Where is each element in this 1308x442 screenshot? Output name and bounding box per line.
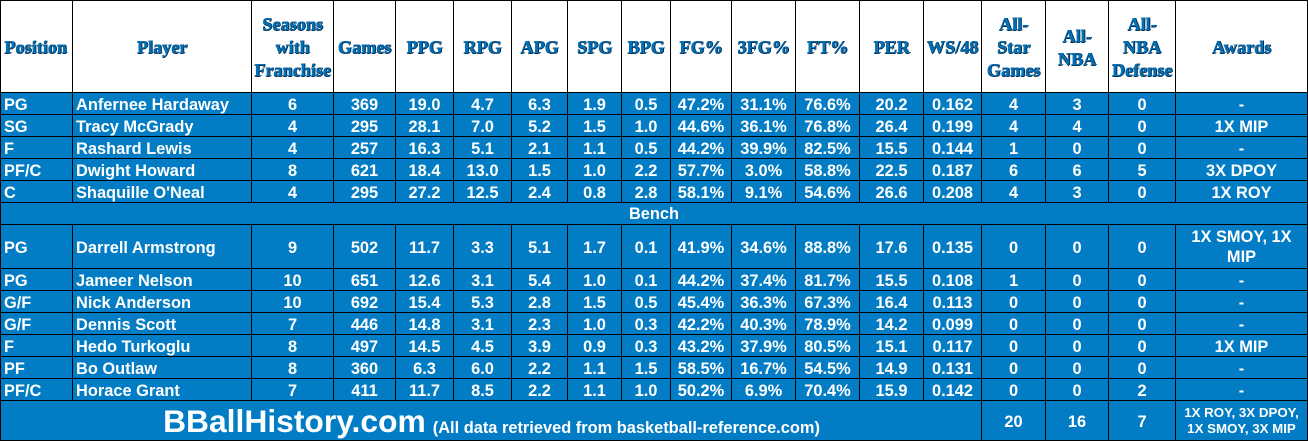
row: Jameer Nelson: 81.7% bbox=[804, 272, 851, 290]
header row: All- bbox=[1062, 26, 1092, 46]
row: Dwight Howard: 58.8% bbox=[804, 162, 851, 180]
row: Dennis Scott: 0 bbox=[1072, 316, 1082, 334]
row: Bo Outlaw: 54.5% bbox=[804, 360, 851, 378]
row: Anfernee Hardaway: 19.0 bbox=[409, 96, 440, 114]
row: Horace Grant: 6.9% bbox=[745, 382, 782, 400]
row: Jameer Nelson: 10 bbox=[283, 272, 302, 290]
row: Hedo Turkoglu: 14.5 bbox=[409, 338, 440, 356]
row: Horace Grant: 1.1 bbox=[583, 382, 606, 400]
row: Bo Outlaw: 1.5 bbox=[635, 360, 657, 378]
row: Tracy McGrady: 5.2 bbox=[528, 118, 551, 136]
row: Dennis Scott: 0.3 bbox=[635, 316, 657, 334]
row: Jameer Nelson: PG bbox=[4, 272, 28, 290]
row: Nick Anderson: 692 bbox=[351, 294, 378, 312]
row: Jameer Nelson: 1 bbox=[1009, 272, 1018, 290]
row: Hedo Turkoglu: 37.9% bbox=[740, 338, 787, 356]
row: Anfernee Hardaway: - bbox=[1239, 96, 1244, 114]
row: Tracy McGrady: 0 bbox=[1137, 118, 1147, 136]
row: Dwight Howard: 621 bbox=[351, 162, 378, 180]
row: Horace Grant: 2 bbox=[1137, 382, 1147, 400]
row: Nick Anderson: 36.3% bbox=[740, 294, 787, 312]
row: Dennis Scott: 2.3 bbox=[528, 316, 551, 334]
header row: FT% bbox=[807, 37, 848, 57]
row: Bo Outlaw: 16.7% bbox=[740, 360, 787, 378]
row: Horace Grant: 0 bbox=[1009, 382, 1018, 400]
row: Jameer Nelson: 44.2% bbox=[678, 272, 724, 290]
row: Dwight Howard: 22.5 bbox=[876, 162, 907, 180]
header row: Games bbox=[987, 60, 1040, 80]
row: Jameer Nelson: 15.5 bbox=[876, 272, 907, 290]
header row: Awards bbox=[1212, 37, 1271, 57]
row: Shaquille O'Neal: 27.2 bbox=[409, 184, 440, 202]
row: Jameer Nelson: 12.6 bbox=[409, 272, 440, 290]
row: Anfernee Hardaway: 76.6% bbox=[804, 96, 851, 114]
row: Bo Outlaw: 8 bbox=[288, 360, 297, 378]
row: Jameer Nelson: 1.0 bbox=[583, 272, 606, 290]
row: Horace Grant: 1.0 bbox=[635, 382, 657, 400]
header row: with bbox=[275, 37, 310, 57]
row: Shaquille O'Neal: 9.1% bbox=[745, 184, 782, 202]
row: Horace Grant: 7 bbox=[288, 382, 297, 400]
row: Tracy McGrady: 1.5 bbox=[583, 118, 606, 136]
row: Dennis Scott: 0.099 bbox=[932, 316, 973, 334]
row: Rashard Lewis: 16.3 bbox=[409, 140, 440, 158]
row: Shaquille O'Neal: 26.6 bbox=[876, 184, 907, 202]
header row: APG bbox=[520, 37, 559, 57]
row: Hedo Turkoglu: 43.2% bbox=[678, 338, 724, 356]
row: Tracy McGrady: 1X MIP bbox=[1215, 118, 1268, 136]
row: Darrell Armstrong: MIP bbox=[1227, 248, 1256, 266]
row: Horace Grant: - bbox=[1239, 382, 1244, 400]
row: Horace Grant: 2.2 bbox=[528, 382, 551, 400]
row: Tracy McGrady: 76.8% bbox=[804, 118, 851, 136]
row: Dwight Howard: 0.187 bbox=[932, 162, 973, 180]
row: Horace Grant: 8.5 bbox=[471, 382, 494, 400]
header row: Defense bbox=[1112, 60, 1172, 80]
row: Dennis Scott: G/F bbox=[4, 316, 31, 334]
row: Shaquille O'Neal: 2.8 bbox=[635, 184, 657, 202]
row: Darrell Armstrong: 5.1 bbox=[528, 238, 551, 256]
row: Anfernee Hardaway: 0.162 bbox=[932, 96, 973, 114]
row: Nick Anderson: 5.3 bbox=[471, 294, 494, 312]
row: Nick Anderson: 0 bbox=[1137, 294, 1147, 312]
row: Nick Anderson: 67.3% bbox=[804, 294, 851, 312]
row: Hedo Turkoglu: 80.5% bbox=[804, 338, 851, 356]
section heading: Bench: Bench bbox=[629, 204, 679, 222]
row: Jameer Nelson: 37.4% bbox=[740, 272, 787, 290]
footer row: source credit and totals: 1X SMOY, 3X MIP bbox=[1187, 420, 1296, 436]
header row: Player bbox=[137, 37, 187, 57]
header row: PER bbox=[873, 37, 910, 57]
row: Rashard Lewis: 2.1 bbox=[528, 140, 551, 158]
row: Tracy McGrady: 7.0 bbox=[471, 118, 494, 136]
row: Horace Grant: Horace Grant bbox=[76, 382, 180, 400]
row: Horace Grant bbox=[0, 378, 1308, 400]
header row: Franchise bbox=[254, 60, 331, 80]
row: Nick Anderson: 0.5 bbox=[635, 294, 657, 312]
row: Anfernee Hardaway: 0 bbox=[1137, 96, 1147, 114]
row: Tracy McGrady: 4 bbox=[1009, 118, 1018, 136]
row: Dwight Howard: 18.4 bbox=[409, 162, 440, 180]
row: Darrell Armstrong: 0 bbox=[1072, 238, 1082, 256]
row: Bo Outlaw: 6.3 bbox=[413, 360, 436, 378]
row: Darrell Armstrong: 34.6% bbox=[740, 238, 787, 256]
row: Tracy McGrady: SG bbox=[4, 118, 28, 136]
row: Dennis Scott: 7 bbox=[288, 316, 297, 334]
row: Anfernee Hardaway: Anfernee Hardaway bbox=[76, 96, 229, 114]
row: Horace Grant: 411 bbox=[351, 382, 378, 400]
header row: Games bbox=[338, 37, 391, 57]
row: Dennis Scott: Dennis Scott bbox=[76, 316, 176, 334]
row: Rashard Lewis: 257 bbox=[351, 140, 378, 158]
row: Darrell Armstrong: PG bbox=[4, 238, 28, 256]
row: Darrell Armstrong: 9 bbox=[288, 238, 297, 256]
row: Bo Outlaw: Bo Outlaw bbox=[76, 360, 157, 378]
row: Shaquille O'Neal: 0 bbox=[1137, 184, 1147, 202]
row: Nick Anderson bbox=[0, 290, 1308, 312]
header row: 3FG% bbox=[737, 37, 790, 57]
row: Bo Outlaw: - bbox=[1239, 360, 1244, 378]
row: Horace Grant: 70.4% bbox=[804, 382, 851, 400]
row: Shaquille O'Neal bbox=[0, 180, 1308, 202]
row: Tracy McGrady: 36.1% bbox=[740, 118, 787, 136]
row: Hedo Turkoglu: 0 bbox=[1137, 338, 1147, 356]
row: Dennis Scott: 14.2 bbox=[876, 316, 907, 334]
row: Anfernee Hardaway: 6.3 bbox=[528, 96, 551, 114]
row: Jameer Nelson bbox=[0, 268, 1308, 290]
row: Dwight Howard: 1.5 bbox=[528, 162, 551, 180]
row: Dwight Howard bbox=[0, 158, 1308, 180]
row: Shaquille O'Neal: Shaquille O'Neal bbox=[76, 184, 205, 202]
row: Darrell Armstrong: Darrell Armstrong bbox=[76, 238, 216, 256]
row: Nick Anderson: Nick Anderson bbox=[76, 294, 191, 312]
row: Shaquille O'Neal: 0.208 bbox=[932, 184, 973, 202]
row: Hedo Turkoglu: 0 bbox=[1072, 338, 1082, 356]
header row: WS/48 bbox=[927, 37, 978, 57]
row: Dwight Howard: 6 bbox=[1072, 162, 1082, 180]
row: Anfernee Hardaway: 369 bbox=[351, 96, 378, 114]
header row: NBA bbox=[1058, 48, 1096, 68]
row: Rashard Lewis: - bbox=[1239, 140, 1244, 158]
row: Shaquille O'Neal: C bbox=[4, 184, 16, 202]
header row: PPG bbox=[406, 37, 443, 57]
row: Nick Anderson: - bbox=[1239, 294, 1244, 312]
row: Dennis Scott: 78.9% bbox=[804, 316, 851, 334]
header row: NBA bbox=[1123, 37, 1161, 57]
footer row: source credit and totals bbox=[0, 400, 1308, 441]
row: Hedo Turkoglu: 3.9 bbox=[528, 338, 551, 356]
row: Rashard Lewis: F bbox=[4, 140, 14, 158]
row: Bo Outlaw: 6.0 bbox=[471, 360, 494, 378]
footer row: source credit and totals: 16 bbox=[1068, 412, 1086, 430]
row: Nick Anderson: 0 bbox=[1009, 294, 1018, 312]
row: Dwight Howard: 3.0% bbox=[745, 162, 782, 180]
row: Shaquille O'Neal: 54.6% bbox=[804, 184, 851, 202]
row: Rashard Lewis: 1.1 bbox=[583, 140, 606, 158]
row: Hedo Turkoglu: Hedo Turkoglu bbox=[76, 338, 190, 356]
row: Darrell Armstrong bbox=[0, 224, 1308, 268]
row: Bo Outlaw: PF bbox=[4, 360, 25, 378]
footer row: source credit and totals: 20 bbox=[1004, 412, 1023, 430]
row: Nick Anderson: 0 bbox=[1072, 294, 1082, 312]
row: Jameer Nelson: 0 bbox=[1137, 272, 1147, 290]
row: Horace Grant: 0 bbox=[1072, 382, 1082, 400]
row: Tracy McGrady: 4 bbox=[288, 118, 297, 136]
row: Tracy McGrady: 26.4 bbox=[876, 118, 907, 136]
row: Dwight Howard: 2.2 bbox=[635, 162, 657, 180]
row: Rashard Lewis: 44.2% bbox=[678, 140, 724, 158]
row: Tracy McGrady: 4 bbox=[1072, 118, 1082, 136]
row: Nick Anderson: 0.113 bbox=[932, 294, 973, 312]
row: Hedo Turkoglu: 497 bbox=[351, 338, 378, 356]
row: Shaquille O'Neal: 3 bbox=[1072, 184, 1082, 202]
row: Shaquille O'Neal: 1X ROY bbox=[1211, 184, 1272, 202]
row: Dennis Scott: - bbox=[1239, 316, 1244, 334]
row: Bo Outlaw bbox=[0, 356, 1308, 378]
row: Dennis Scott: 3.1 bbox=[471, 316, 494, 334]
row: Hedo Turkoglu: F bbox=[4, 338, 14, 356]
row: Dwight Howard: PF/C bbox=[4, 162, 41, 180]
row: Bo Outlaw: 0 bbox=[1009, 360, 1018, 378]
row: Anfernee Hardaway: 31.1% bbox=[740, 96, 787, 114]
row: Tracy McGrady: 1.0 bbox=[635, 118, 657, 136]
row: Tracy McGrady: 0.199 bbox=[932, 118, 973, 136]
footer row: source credit and totals: BBallHistory.com bbox=[163, 402, 426, 438]
row: Rashard Lewis: 0 bbox=[1137, 140, 1147, 158]
row: Anfernee Hardaway bbox=[0, 92, 1308, 114]
row: Anfernee Hardaway: PG bbox=[4, 96, 28, 114]
row: Nick Anderson: 45.4% bbox=[678, 294, 724, 312]
row: Anfernee Hardaway: 4 bbox=[1009, 96, 1018, 114]
row: Shaquille O'Neal: 0.8 bbox=[583, 184, 606, 202]
row: Darrell Armstrong: 17.6 bbox=[876, 238, 907, 256]
row: Hedo Turkoglu: 1X MIP bbox=[1215, 338, 1268, 356]
row: Nick Anderson: 15.4 bbox=[409, 294, 440, 312]
row: Tracy McGrady: Tracy McGrady bbox=[76, 118, 194, 136]
header row: All- bbox=[999, 14, 1028, 34]
row: Dennis Scott: 1.0 bbox=[583, 316, 606, 334]
row: Dwight Howard: 13.0 bbox=[467, 162, 498, 180]
row: Nick Anderson: 1.5 bbox=[583, 294, 606, 312]
row: Dwight Howard: 57.7% bbox=[678, 162, 724, 180]
row: Darrell Armstrong: 0.135 bbox=[932, 238, 973, 256]
row: Tracy McGrady: 295 bbox=[351, 118, 378, 136]
row: Nick Anderson: G/F bbox=[4, 294, 31, 312]
row: Bo Outlaw: 360 bbox=[351, 360, 378, 378]
row: Jameer Nelson: 0.1 bbox=[635, 272, 657, 290]
row: Rashard Lewis: 0.5 bbox=[635, 140, 657, 158]
row: Rashard Lewis: 82.5% bbox=[804, 140, 851, 158]
row: Bo Outlaw: 0 bbox=[1137, 360, 1147, 378]
header row: Star bbox=[997, 37, 1030, 57]
row: Hedo Turkoglu: 0.9 bbox=[583, 338, 606, 356]
row: Horace Grant: 11.7 bbox=[409, 382, 440, 400]
row: Dwight Howard: Dwight Howard bbox=[76, 162, 195, 180]
row: Bo Outlaw: 0.131 bbox=[932, 360, 973, 378]
row: Dennis Scott: 42.2% bbox=[678, 316, 724, 334]
header row: SPG bbox=[577, 37, 612, 57]
row: Darrell Armstrong: 0.1 bbox=[635, 238, 657, 256]
row: Dwight Howard: 5 bbox=[1137, 162, 1147, 180]
row: Anfernee Hardaway: 0.5 bbox=[635, 96, 657, 114]
row: Darrell Armstrong: 0 bbox=[1137, 238, 1147, 256]
row: Hedo Turkoglu: 15.1 bbox=[876, 338, 907, 356]
row: Anfernee Hardaway: 20.2 bbox=[876, 96, 907, 114]
row: Darrell Armstrong: 11.7 bbox=[409, 238, 440, 256]
row: Darrell Armstrong: 0 bbox=[1009, 238, 1018, 256]
row: Horace Grant: 0.142 bbox=[932, 382, 973, 400]
row: Hedo Turkoglu: 8 bbox=[288, 338, 297, 356]
footer row: source credit and totals: (All data retrieved from basketball-reference.com) bbox=[433, 418, 820, 436]
row: Darrell Armstrong: 502 bbox=[351, 238, 378, 256]
row: Jameer Nelson: 5.4 bbox=[528, 272, 551, 290]
row: Horace Grant: 15.9 bbox=[876, 382, 907, 400]
row: Nick Anderson: 2.8 bbox=[528, 294, 551, 312]
row: Rashard Lewis: 39.9% bbox=[740, 140, 787, 158]
row: Jameer Nelson: 3.1 bbox=[471, 272, 494, 290]
row: Rashard Lewis: Rashard Lewis bbox=[76, 140, 192, 158]
row: Darrell Armstrong: 41.9% bbox=[678, 238, 724, 256]
row: Shaquille O'Neal: 4 bbox=[288, 184, 297, 202]
row: Tracy McGrady: 44.6% bbox=[678, 118, 724, 136]
row: Rashard Lewis bbox=[0, 136, 1308, 158]
row: Darrell Armstrong: 1.7 bbox=[583, 238, 606, 256]
row: Anfernee Hardaway: 1.9 bbox=[583, 96, 606, 114]
header row: Seasons bbox=[262, 14, 323, 34]
header row: Position bbox=[4, 37, 67, 57]
row: Rashard Lewis: 4 bbox=[288, 140, 297, 158]
row: Rashard Lewis: 15.5 bbox=[876, 140, 907, 158]
row: Shaquille O'Neal: 58.1% bbox=[678, 184, 724, 202]
row: Dennis Scott: 0 bbox=[1137, 316, 1147, 334]
row: Dennis Scott: 446 bbox=[351, 316, 378, 334]
section heading: Bench bbox=[0, 202, 1308, 224]
row: Anfernee Hardaway: 47.2% bbox=[678, 96, 724, 114]
row: Bo Outlaw: 0 bbox=[1072, 360, 1082, 378]
row: Darrell Armstrong: 3.3 bbox=[471, 238, 494, 256]
row: Nick Anderson: 16.4 bbox=[876, 294, 907, 312]
row: Dennis Scott: 14.8 bbox=[409, 316, 440, 334]
row: Rashard Lewis: 0.144 bbox=[932, 140, 973, 158]
row: Hedo Turkoglu: 4.5 bbox=[471, 338, 494, 356]
row: Shaquille O'Neal: 4 bbox=[1009, 184, 1018, 202]
row: Rashard Lewis: 0 bbox=[1072, 140, 1082, 158]
row: Hedo Turkoglu: 0.117 bbox=[932, 338, 973, 356]
row: Dwight Howard: 6 bbox=[1009, 162, 1018, 180]
row: Dennis Scott: 0 bbox=[1009, 316, 1018, 334]
row: Jameer Nelson: 0 bbox=[1072, 272, 1082, 290]
header row bbox=[0, 0, 1308, 92]
row: Jameer Nelson: Jameer Nelson bbox=[76, 272, 193, 290]
row: Dennis Scott: 40.3% bbox=[740, 316, 787, 334]
row: Bo Outlaw: 14.9 bbox=[876, 360, 907, 378]
row: Hedo Turkoglu: 0.3 bbox=[635, 338, 657, 356]
row: Shaquille O'Neal: 2.4 bbox=[528, 184, 551, 202]
row: Hedo Turkoglu bbox=[0, 334, 1308, 356]
row: Darrell Armstrong: 1X SMOY, 1X bbox=[1191, 228, 1292, 246]
row: Bo Outlaw: 58.5% bbox=[678, 360, 724, 378]
header row: FG% bbox=[679, 37, 723, 57]
row: Anfernee Hardaway: 6 bbox=[288, 96, 297, 114]
row: Hedo Turkoglu: 0 bbox=[1009, 338, 1018, 356]
row: Bo Outlaw: 2.2 bbox=[528, 360, 551, 378]
row: Dwight Howard: 1.0 bbox=[583, 162, 606, 180]
header row: All- bbox=[1127, 14, 1157, 34]
row: Shaquille O'Neal: 295 bbox=[351, 184, 378, 202]
row: Jameer Nelson: 651 bbox=[351, 272, 378, 290]
row: Anfernee Hardaway: 3 bbox=[1072, 96, 1082, 114]
row: Darrell Armstrong: 88.8% bbox=[804, 238, 851, 256]
row: Anfernee Hardaway: 4.7 bbox=[471, 96, 494, 114]
header row: BPG bbox=[627, 37, 665, 57]
row: Bo Outlaw: 1.1 bbox=[583, 360, 606, 378]
row: Dennis Scott bbox=[0, 312, 1308, 334]
row: Horace Grant: 50.2% bbox=[678, 382, 724, 400]
row: Nick Anderson: 10 bbox=[283, 294, 302, 312]
footer row: source credit and totals: 7 bbox=[1137, 412, 1147, 430]
row: Dwight Howard: 8 bbox=[288, 162, 297, 180]
row: Rashard Lewis: 1 bbox=[1009, 140, 1018, 158]
row: Rashard Lewis: 5.1 bbox=[471, 140, 494, 158]
row: Jameer Nelson: 0.108 bbox=[932, 272, 973, 290]
row: Tracy McGrady: 28.1 bbox=[409, 118, 440, 136]
row: Tracy McGrady bbox=[0, 114, 1308, 136]
row: Dwight Howard: 3X DPOY bbox=[1206, 162, 1277, 180]
header row: RPG bbox=[463, 37, 502, 57]
footer row: source credit and totals: 1X ROY, 3X DPOY, bbox=[1184, 404, 1299, 420]
row: Jameer Nelson: - bbox=[1239, 272, 1244, 290]
row: Shaquille O'Neal: 12.5 bbox=[467, 184, 498, 202]
row: Horace Grant: PF/C bbox=[4, 382, 41, 400]
